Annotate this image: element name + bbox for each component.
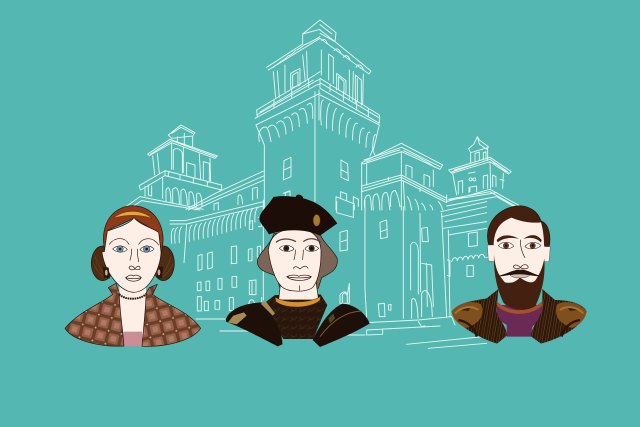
ears [487,245,550,262]
gold collar [275,296,321,307]
gold badge [313,214,320,226]
windows [198,217,261,271]
headband [113,211,152,218]
small left tower [168,125,195,147]
eyes and brows [497,235,542,249]
left shoulder [226,302,282,346]
portrait: bearded man [452,206,587,344]
nose and mouth [126,249,141,281]
nose and mouth [287,250,311,290]
portrait: woman with headband [65,206,201,346]
necklace [119,294,147,299]
purple shirt [497,305,542,337]
face [268,228,321,291]
eyes and brows [276,239,321,251]
lower walls and windows [170,200,488,348]
black beret [259,195,337,236]
main tower top right and right towers [320,20,520,210]
eyes [109,239,159,252]
beard [494,255,545,310]
moustache [499,270,539,276]
neck [279,282,319,300]
dark doublet [263,294,327,339]
portrait: man with black beret [226,195,370,347]
neck [119,285,146,338]
long hair [257,232,337,288]
gold shoulders [452,302,482,328]
right tower [362,143,443,169]
hair [487,206,550,248]
mouth [510,274,530,278]
brown quilted cape [65,283,201,346]
far lantern and roof [469,137,488,163]
face [494,218,544,282]
collar band [497,301,542,314]
nose [513,240,528,269]
right shoulder [313,304,370,347]
castle line drawing [126,20,520,348]
main tower top and left wing [126,20,320,210]
hair buns [91,246,174,281]
hair [103,206,163,252]
earrings [103,267,163,278]
face [102,218,161,292]
jacket [452,289,587,344]
ground lines [196,317,487,348]
pink bodice [123,332,142,346]
